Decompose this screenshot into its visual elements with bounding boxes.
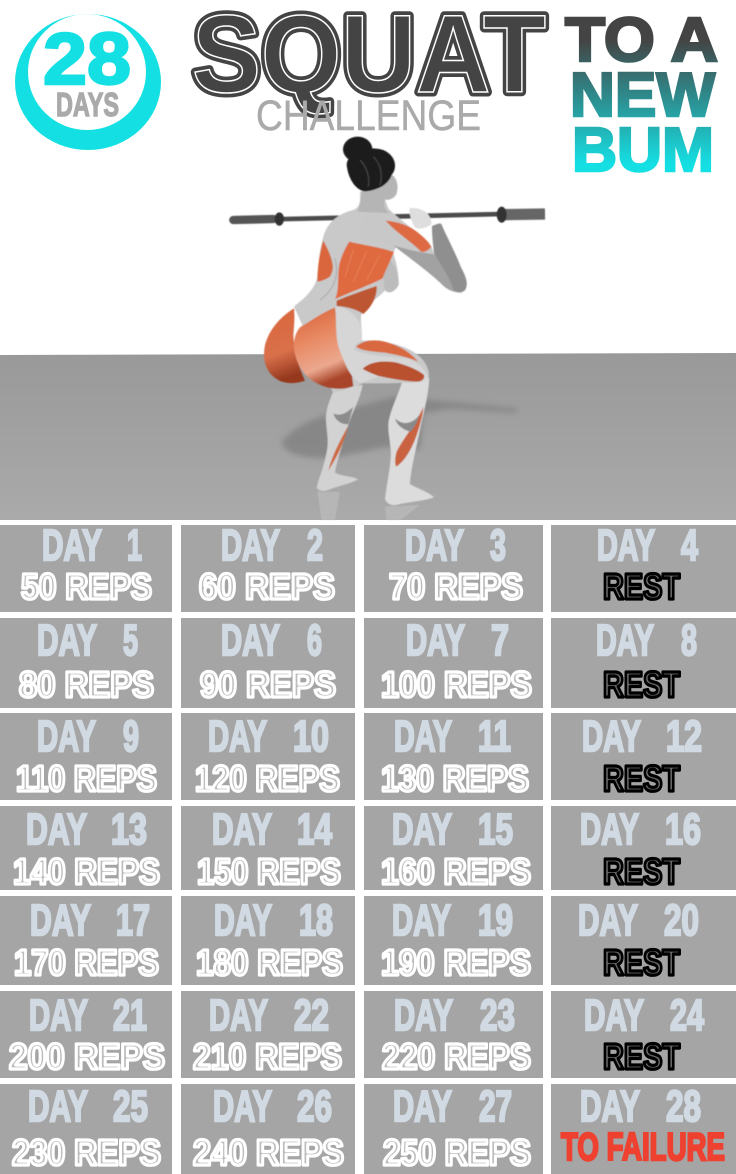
day 8: REST [603, 664, 680, 705]
foot reflections [317, 492, 420, 520]
row 3 [0, 712, 736, 800]
floor [0, 353, 736, 520]
day 3: DAY [405, 521, 464, 570]
day 14: 150 REPS [197, 851, 341, 892]
day 19: 190 REPS [381, 942, 531, 983]
day 2: DAY [221, 521, 280, 570]
day 23 [364, 991, 543, 1078]
day 23: 220 REPS [382, 1036, 531, 1077]
day 24 [551, 991, 736, 1078]
day 27: 250 REPS [383, 1132, 531, 1173]
day 19: DAY [392, 896, 451, 945]
back leg [317, 385, 363, 491]
day 21: DAY [29, 991, 88, 1040]
day 6: DAY [221, 616, 280, 665]
day 28: DAY [580, 1082, 640, 1131]
day 21: 200 REPS [9, 1036, 165, 1077]
subtitle: challenge: CHALLENGE [256, 92, 481, 140]
day 14: 14 [297, 805, 332, 854]
day 12: 12 [666, 712, 702, 761]
day 5 [0, 616, 172, 708]
day 8: 8 [681, 616, 697, 665]
day 17: 17 [116, 896, 150, 945]
day 15 [364, 805, 543, 892]
day 10: 120 REPS [195, 758, 340, 799]
day 18: 180 REPS [196, 942, 343, 983]
day 10 [181, 712, 355, 800]
row 4 [0, 805, 736, 892]
day 1: DAY [42, 521, 102, 570]
day 7: DAY [406, 616, 465, 665]
day 20: DAY [578, 896, 638, 945]
day 5: 5 [123, 616, 138, 665]
day 25 [0, 1082, 172, 1174]
row 6 [0, 991, 736, 1078]
day 16 [551, 805, 736, 892]
day 20: REST [603, 942, 680, 983]
day 4: REST [603, 566, 680, 607]
day 23: DAY [394, 991, 453, 1040]
day 4: 4 [681, 521, 698, 570]
row 1 [0, 521, 736, 612]
body base [294, 192, 430, 393]
forearm [432, 224, 467, 292]
side chest [384, 258, 399, 292]
day 9 [0, 712, 172, 800]
day 22: DAY [209, 991, 268, 1040]
day 1 [0, 521, 172, 612]
day 9: 9 [123, 712, 139, 761]
day 17 [0, 896, 172, 985]
day 14: DAY [212, 805, 272, 854]
day 1: 50 REPS [21, 566, 152, 607]
day 10: DAY [208, 712, 267, 761]
day 21 [0, 991, 172, 1078]
hand [409, 208, 431, 228]
day 6: 90 REPS [200, 664, 336, 705]
quadriceps [356, 340, 424, 382]
glutes [264, 308, 353, 389]
day 6 [181, 616, 355, 708]
day 22: 210 REPS [193, 1036, 342, 1077]
badge: 28 days: DAYS [56, 86, 119, 123]
spine shadow line [320, 258, 337, 300]
day 11: 11 [478, 712, 511, 761]
day 6: 6 [307, 616, 322, 665]
day 20: 20 [664, 896, 699, 945]
day 20 [551, 896, 736, 985]
day 28: 28 [666, 1082, 701, 1131]
day 2 [181, 521, 355, 612]
day 19: 19 [478, 896, 513, 945]
day 25: DAY [28, 1082, 88, 1131]
day 24: DAY [584, 991, 644, 1040]
day 2: 2 [307, 521, 323, 570]
day 26 [181, 1082, 355, 1174]
row 7 [0, 1082, 736, 1174]
day 2: 60 REPS [199, 566, 335, 607]
day 23: 23 [480, 991, 515, 1040]
day 5: DAY [37, 616, 97, 665]
day 7: 100 REPS [381, 664, 532, 705]
day 15: DAY [392, 805, 452, 854]
day 18 [181, 896, 355, 985]
upper arm [393, 245, 464, 293]
day 16: REST [603, 851, 680, 892]
front leg [385, 378, 434, 505]
heading: to a new bum [565, 6, 718, 185]
day 26: DAY [213, 1082, 272, 1131]
neck and face [357, 173, 398, 213]
badge: 28 days [15, 14, 161, 150]
hip and thigh band [335, 307, 429, 383]
day 9: DAY [37, 712, 96, 761]
day 27: DAY [393, 1082, 452, 1131]
day 10: 10 [293, 712, 329, 761]
day 4: DAY [597, 521, 655, 570]
day 16: 16 [665, 805, 701, 854]
day 22 [181, 991, 355, 1078]
day 16: DAY [580, 805, 639, 854]
shoulder [358, 214, 434, 254]
row 2 [0, 616, 736, 708]
day 27: 27 [479, 1082, 512, 1131]
day 8 [551, 616, 736, 708]
day 24: 24 [670, 991, 704, 1040]
day 21: 21 [113, 991, 147, 1040]
floor shadow [282, 397, 517, 458]
day 19 [364, 896, 543, 985]
grid: daily reps [0, 521, 736, 1174]
day 28 [551, 1082, 736, 1174]
day 15: 15 [478, 805, 513, 854]
back muscles [317, 241, 394, 314]
day 24: REST [603, 1036, 680, 1077]
day 14 [181, 805, 355, 892]
day 18: DAY [214, 896, 272, 945]
day 15: 160 REPS [381, 851, 531, 892]
day 3: 3 [490, 521, 506, 570]
heading: to a new bum: NEW [570, 61, 715, 130]
day 9: 110 REPS [16, 758, 157, 799]
day 5: 80 REPS [19, 664, 154, 705]
day 7 [364, 616, 543, 708]
day 18: 18 [299, 896, 333, 945]
row 5 [0, 896, 736, 985]
day 13: 13 [111, 805, 147, 854]
day 26: 26 [297, 1082, 332, 1131]
day 8: DAY [596, 616, 654, 665]
heading: to a new bum: TO A [565, 6, 718, 75]
day 11: DAY [394, 712, 452, 761]
day 12 [551, 712, 736, 800]
day 25: 230 REPS [12, 1132, 161, 1173]
day 25: 25 [113, 1082, 148, 1131]
day 27 [364, 1082, 543, 1174]
day 17: 170 REPS [14, 942, 159, 983]
day 1: 1 [127, 521, 142, 570]
day 13: 140 REPS [13, 851, 160, 892]
day 3 [364, 521, 543, 612]
day 11 [364, 712, 543, 800]
heading: to a new bum: BUM [572, 116, 714, 185]
hair [343, 137, 395, 191]
day 4 [551, 521, 736, 612]
day 7: 7 [491, 616, 509, 665]
day 11: 130 REPS [381, 758, 529, 799]
day 12: DAY [582, 712, 641, 761]
day 17: DAY [30, 896, 91, 945]
day 13 [0, 805, 172, 892]
day 13: DAY [26, 805, 87, 854]
illustration: woman squatting with barbell [230, 137, 545, 520]
day 26: 240 REPS [193, 1132, 344, 1173]
day 3: 70 REPS [389, 566, 523, 607]
day 22: 22 [294, 991, 329, 1040]
barbell [230, 207, 545, 226]
day 12: REST [603, 758, 680, 799]
badge: 28 days: 28 [43, 19, 131, 100]
